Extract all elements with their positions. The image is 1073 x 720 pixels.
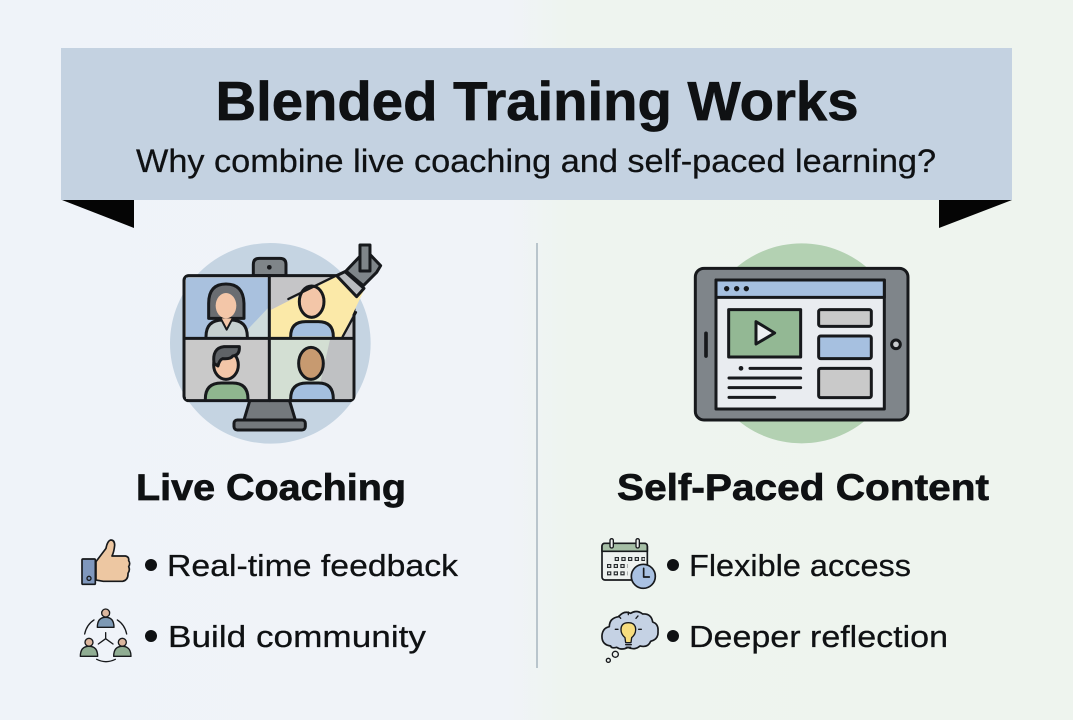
heading: self-paced content: Self-Paced Content (617, 467, 989, 508)
person: top left (206, 284, 247, 337)
person: bottom right (291, 347, 333, 399)
video player (729, 310, 801, 357)
bullet: real-time feedback: Real-time feedback (167, 548, 459, 583)
panel: self-paced content (602, 243, 989, 662)
icon: community (80, 609, 131, 662)
title banner (61, 48, 1012, 228)
heading: live coaching: Live Coaching (136, 467, 406, 508)
icon: tablet with course page (695, 243, 908, 443)
panel: live coaching (80, 243, 459, 662)
icon: thumbs up (82, 540, 130, 584)
bullet: flexible access: Flexible access (689, 548, 911, 583)
icon: calendar and clock (602, 539, 655, 588)
person: top right (291, 286, 333, 337)
icon: video call monitor with spotlight (170, 243, 381, 444)
icon: thought bubble with light bulb (602, 611, 658, 662)
spotlight (288, 245, 381, 337)
person: bottom left (205, 347, 248, 399)
bullet: deeper reflection: Deeper reflection (689, 619, 948, 654)
subtitle: Why combine live coaching and self-paced learning? (136, 143, 936, 179)
bullet: build community: Build community (168, 619, 427, 654)
title: Blended Training Works (216, 70, 858, 132)
